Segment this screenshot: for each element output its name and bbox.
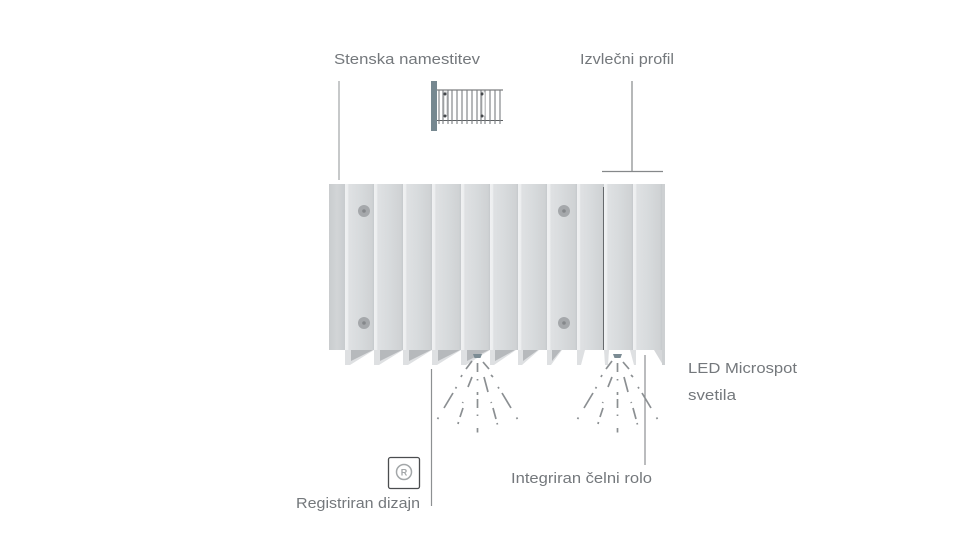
label: integrated front roller: Integriran čelni rolo [511, 470, 652, 487]
leader line: front roller [644, 355, 646, 465]
leader line: wall mounting [338, 81, 340, 180]
extraction profile seam [602, 187, 604, 350]
panel: louvre product [329, 184, 665, 365]
leader line: registered design [430, 369, 432, 506]
slat faces [345, 184, 374, 350]
leader line: extraction profile [602, 81, 663, 172]
icon: wall mount side view [431, 81, 503, 131]
screws [358, 205, 570, 329]
label: registered design: Registriran dizajn [296, 495, 420, 512]
icon: registered design badge [388, 458, 420, 488]
icon: registered design badge: R [401, 468, 408, 478]
label: extraction profile: Izvlečni profil [580, 51, 674, 68]
label: LED microspot lights [688, 360, 798, 404]
label: LED microspot lights: LED Microspot [688, 360, 798, 377]
slat teeth [345, 350, 665, 365]
first flat slat [329, 184, 345, 350]
label: LED microspot lights: svetila [688, 387, 737, 404]
icon: LED light beam right [578, 354, 658, 432]
icon: LED light beam left [438, 354, 518, 432]
label: wall mounting: Stenska namestitev [334, 51, 481, 68]
